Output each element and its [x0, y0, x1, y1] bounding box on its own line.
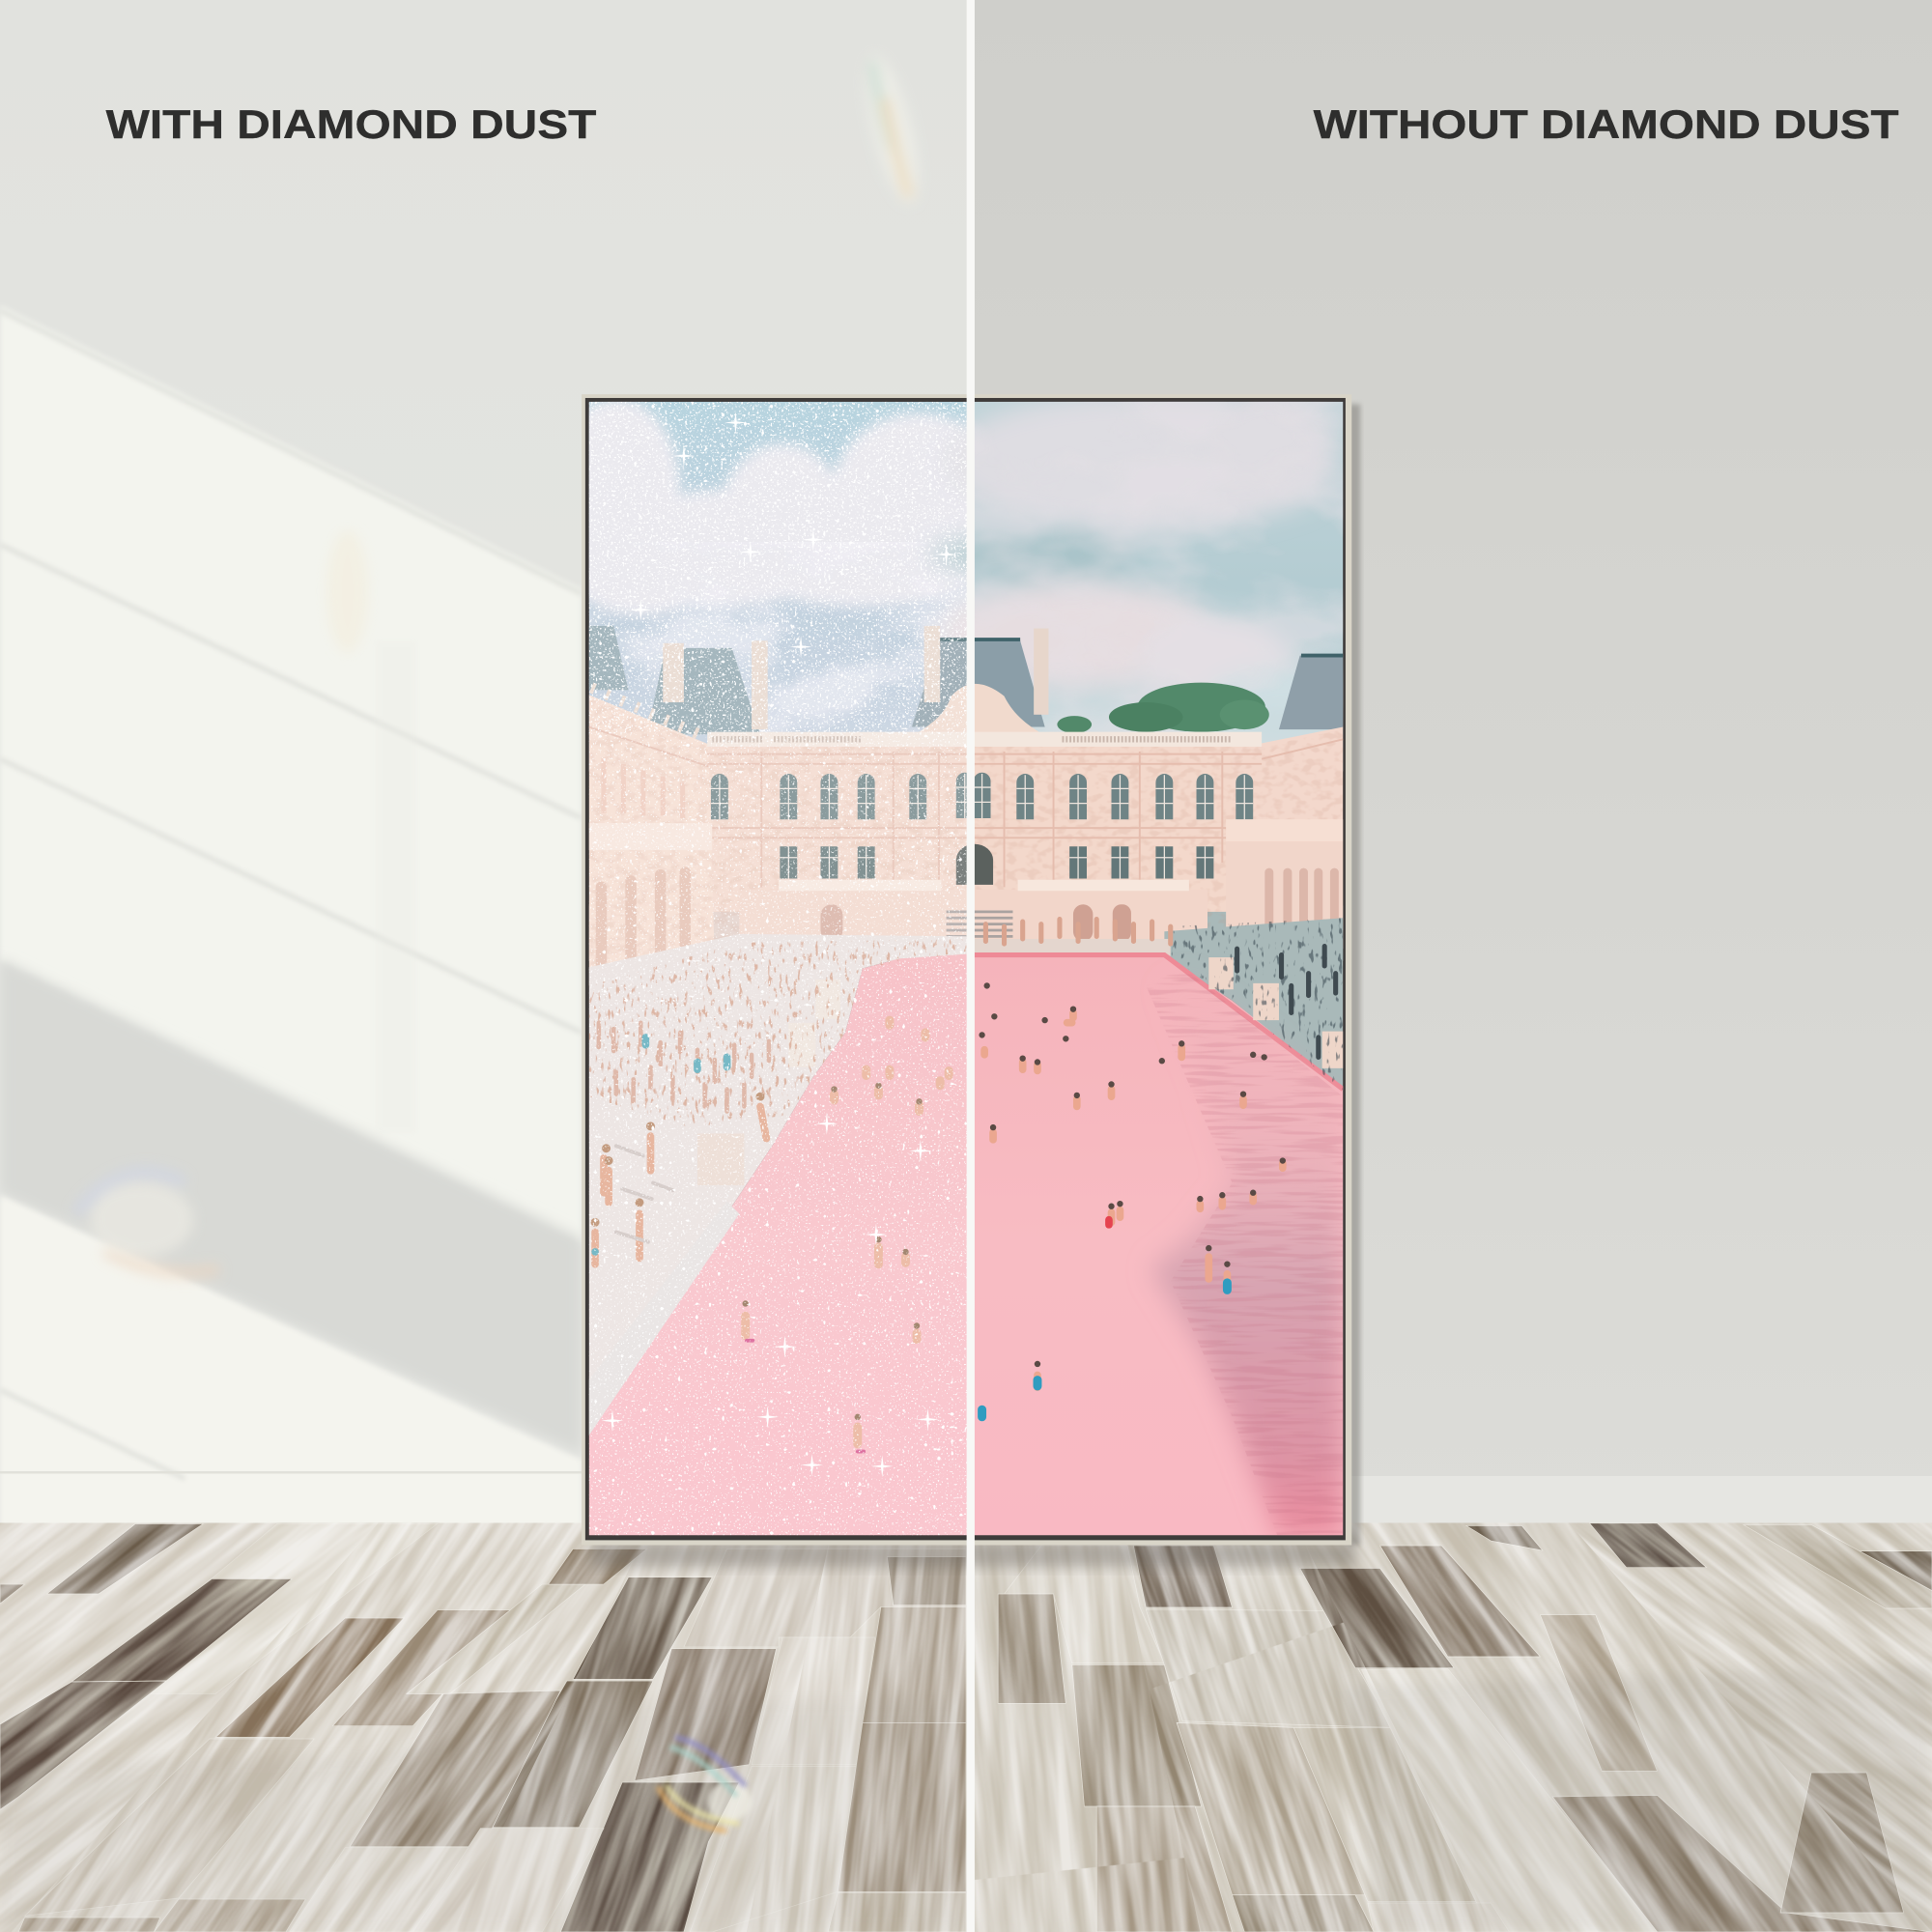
left curb	[589, 1202, 739, 1435]
glitter coarse	[589, 402, 967, 1535]
clouds right	[930, 388, 1355, 715]
wood floor	[0, 1523, 1932, 1932]
crowd right	[985, 920, 1336, 1057]
pool edge right	[974, 955, 1343, 1090]
trees	[1057, 683, 1269, 733]
plaza right	[1164, 918, 1343, 1091]
palace left wing	[589, 695, 715, 985]
clouds left	[589, 402, 967, 620]
sunlight patch on left wall	[0, 305, 582, 1244]
frame drop shadow	[1348, 404, 1360, 1545]
swimmers right	[982, 985, 1283, 1417]
right baseboard	[1351, 1476, 1932, 1525]
sky left	[589, 402, 967, 771]
water ripples	[1140, 974, 1343, 1540]
wall: left half	[0, 307, 582, 1522]
inner dark frame	[585, 398, 1346, 1540]
cloud mottling left	[589, 587, 966, 734]
soft floor shadow right	[1343, 1665, 1932, 1932]
outer frame	[582, 394, 1351, 1545]
left wing windows and balcony	[589, 757, 712, 974]
star glints	[601, 412, 957, 1477]
pool water	[589, 953, 1343, 1537]
sky right	[967, 402, 1343, 771]
roofline statues	[591, 688, 705, 737]
left baseboard	[0, 1471, 582, 1473]
diamond dust wash	[589, 402, 967, 1535]
right wing balcony and arcade	[1226, 819, 1343, 936]
soft floor shadow left	[0, 1700, 967, 1932]
crowd texture left	[589, 936, 967, 1133]
crowd left	[595, 1023, 769, 1264]
lower terrace	[739, 880, 1208, 945]
shadow under the frame	[591, 1540, 1355, 1567]
rainbow light: mid wall	[327, 529, 368, 653]
palace right wing	[1233, 727, 1343, 949]
lower windows	[780, 846, 1213, 878]
glitter sky	[589, 402, 967, 734]
floor planks	[0, 1523, 1932, 1932]
window bar shadows	[0, 310, 582, 1479]
chimneys	[663, 626, 1048, 729]
framed artwork	[552, 388, 1360, 1545]
palace main block	[707, 744, 1262, 912]
ground under palace	[589, 906, 1343, 961]
rainbow light: top of wall	[855, 50, 929, 209]
lower sunlight patch	[0, 1195, 582, 1528]
crowd texture right	[1164, 918, 1343, 1091]
shadow band on left wall	[0, 958, 582, 1454]
cloud mottling right	[967, 402, 1343, 734]
palace door	[956, 844, 993, 885]
divider	[967, 0, 975, 1932]
wood grain texture	[0, 1523, 1932, 1932]
heading: with diamond dust: WITH DIAMOND DUST	[106, 101, 597, 147]
glitter fine	[589, 402, 967, 1535]
central pediment	[902, 684, 1060, 744]
palace stone texture	[589, 697, 1343, 974]
rainbow light: lower wall	[76, 1173, 219, 1272]
upper windows	[711, 773, 1253, 819]
window frame vertical tint	[376, 640, 416, 1133]
rainbow light: floor	[658, 1737, 752, 1831]
cornices and pilasters	[589, 727, 1343, 887]
pedestals	[697, 957, 1343, 1185]
balustrade	[707, 732, 1262, 747]
swimmers left	[746, 1020, 949, 1452]
heading: without diamond dust: WITHOUT DIAMOND DUST	[1314, 101, 1899, 147]
wall: right half	[974, 0, 1932, 1528]
roofs	[589, 626, 1343, 734]
artwork photo	[552, 388, 1355, 1540]
plaza left	[589, 934, 974, 1435]
pool shadow	[1151, 967, 1343, 1537]
terrace strip right	[974, 939, 1171, 956]
